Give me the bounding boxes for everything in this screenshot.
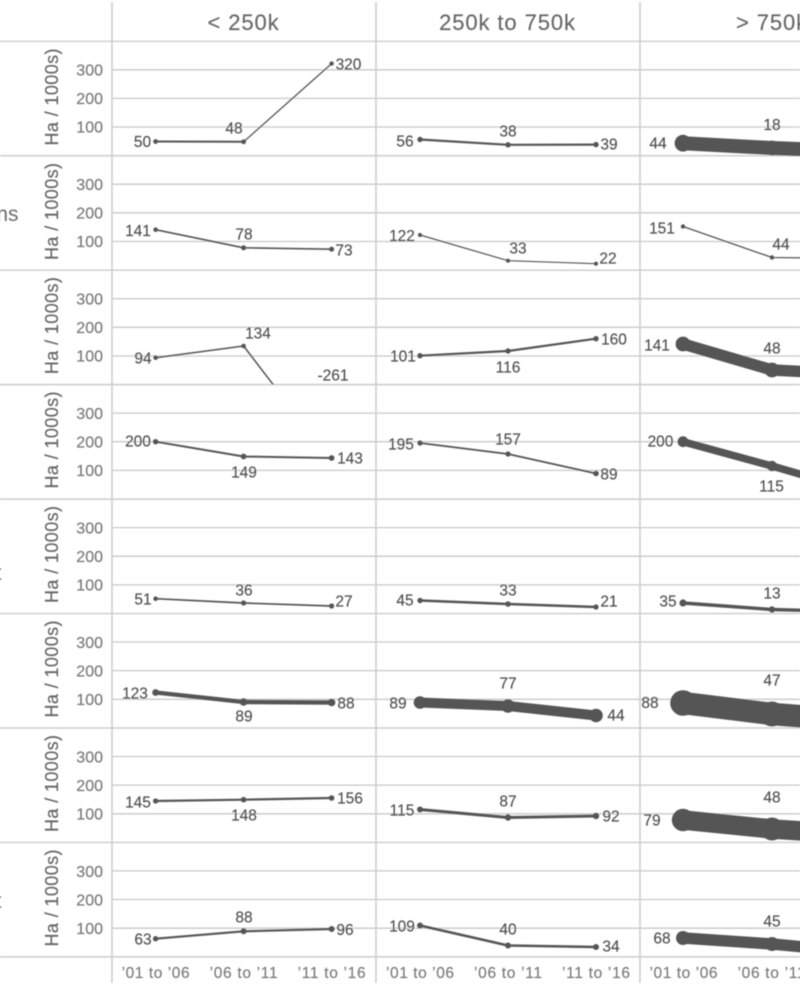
y axis: row 8: 100 — [76, 921, 103, 938]
line panel: row 1, 250k to 750k — [396, 124, 618, 154]
y axis: row 4: Ha / 1000s) — [42, 392, 62, 488]
y axis: row 2: 300 — [76, 177, 103, 194]
line panel: row 4, 250k to 750k: 157 — [495, 432, 521, 448]
line panel: row 1, 250k to 750k: 38 — [499, 124, 517, 140]
column heading: 250k to 750k: 250k to 750k — [439, 10, 576, 35]
line panel: row 4, 250k to 750k — [388, 432, 618, 484]
line panel: row 3, 250k to 750k — [390, 332, 627, 376]
line panel: row 8, 250k to 750k: 34 — [602, 938, 620, 956]
line panel: row 8, over 750k: 45 — [763, 914, 781, 930]
line panel: row 8, over 750k — [653, 914, 800, 951]
y axis: row 1: 200 — [76, 91, 103, 108]
line panel: row 6, over 750k: 88 — [641, 695, 659, 712]
y axis: row 6: 200 — [76, 664, 103, 681]
line panel: row 3, 250k to 750k: 160 — [601, 332, 627, 348]
y axis: row 1: 300 — [76, 63, 103, 80]
line panel: row 5, over 750k — [659, 586, 800, 613]
line panel: row 2, 250k to 750k: 122 — [389, 228, 415, 245]
y axis: row 6: Ha / 1000s) — [42, 620, 62, 718]
line panel: row 3, over 750k — [644, 337, 800, 377]
line panel: row 6, under 250k — [122, 686, 355, 726]
y axis: row 5: 100 — [76, 578, 103, 595]
line panel: row 2, under 250k: 141 — [125, 223, 151, 240]
x axis labels: over 750k: ’01 to ’06 — [650, 965, 718, 982]
y axis: row 3: Ha / 1000s) — [42, 277, 62, 374]
line panel: row 5, 250k to 750k: 33 — [499, 582, 517, 600]
line panel: row 1, over 750k — [649, 117, 800, 155]
y axis: row 6: 100 — [76, 692, 103, 709]
line panel: row 8, under 250k: 96 — [336, 922, 354, 939]
line panel: row 8, under 250k: 63 — [134, 932, 152, 948]
y axis: row 6: 300 — [76, 635, 103, 652]
line panel: row 7, 250k to 750k: 87 — [499, 794, 517, 810]
line panel: row 7, under 250k: 148 — [231, 808, 257, 824]
y axis: row 4: 200 — [76, 435, 103, 452]
line panel: row 1, 250k to 750k: 56 — [396, 134, 414, 150]
x axis labels: under 250k — [122, 965, 366, 982]
y axis: row 5 — [42, 506, 103, 603]
line panel: row 4, under 250k: 200 — [125, 434, 151, 450]
y axis: row 1: 100 — [76, 120, 103, 137]
line panel: row 5, over 750k: 13 — [763, 586, 781, 602]
line panel: row 6, over 750k: 47 — [763, 672, 781, 690]
x axis labels: 250k to 750k — [386, 965, 630, 982]
line panel: row 8, under 250k: 88 — [235, 910, 253, 926]
y axis: row 5: Ha / 1000s) — [42, 506, 62, 603]
y axis: row 7 — [42, 735, 103, 832]
y axis: row 4 — [42, 392, 103, 488]
column heading: under 250k: < 250k — [207, 10, 280, 35]
line panel: row 5, under 250k: 27 — [335, 594, 353, 610]
line panel: row 3, under 250k (third point clipped off scale) — [134, 326, 348, 385]
y axis: row 7: 200 — [76, 778, 103, 795]
line panel: row 3, under 250k (third point clipped off scale): 94 — [134, 350, 152, 368]
y axis: row 2 — [42, 163, 103, 260]
line panel: row 1, 250k to 750k: 39 — [600, 136, 618, 154]
y axis: row 8: 300 — [76, 864, 103, 881]
line panel: row 8, 250k to 750k: 40 — [499, 922, 517, 938]
line panel: row 4, under 250k: 149 — [231, 464, 257, 482]
y axis: row 3: 300 — [76, 292, 103, 309]
line panel: row 5, over 750k: 35 — [659, 594, 677, 610]
line panel: row 7, under 250k — [125, 790, 363, 824]
line panel: row 8, 250k to 750k: 109 — [389, 918, 415, 936]
line panel: row 3, over 750k: 48 — [763, 340, 781, 358]
line panel: row 3, 250k to 750k: 101 — [390, 348, 416, 366]
line panel: row 1, over 750k: 44 — [649, 136, 667, 152]
line panel: row 2, under 250k: 78 — [235, 226, 253, 244]
line panel: row 6, 250k to 750k: 77 — [499, 676, 517, 692]
line panel: row 1, under 250k — [134, 56, 362, 151]
x axis labels: under 250k: ’01 to ’06 — [122, 965, 190, 982]
y axis: row 5: 200 — [76, 549, 103, 566]
cropped row label fragments — [0, 203, 18, 913]
x axis labels: 250k to 750k: ’01 to ’06 — [386, 965, 454, 982]
y axis: row 5: 300 — [76, 521, 103, 538]
line panel: row 4, over 750k: 200 — [648, 434, 674, 450]
x axis labels: 250k to 750k: ’11 to ’16 — [562, 965, 630, 982]
line panel: row 2, under 250k — [125, 223, 353, 260]
line panel: row 8, 250k to 750k — [389, 918, 620, 956]
line panel: row 7, under 250k: 156 — [337, 790, 363, 808]
y axis: row 7: Ha / 1000s) — [42, 735, 62, 832]
y axis: row 4: 100 — [76, 463, 103, 480]
y axis: row 2: 100 — [76, 234, 103, 251]
line panel: row 1, under 250k: 320 — [336, 56, 362, 74]
y axis: row 7: 100 — [76, 807, 103, 824]
line panel: row 5, under 250k: 36 — [235, 582, 253, 600]
line panel: row 4, under 250k: 143 — [337, 450, 363, 468]
y axis: row 8: 200 — [76, 893, 103, 910]
y axis: row 1: Ha / 1000s) — [42, 48, 62, 146]
y axis: row 6 — [42, 620, 103, 718]
line panel: row 2, over 750k: 151 — [649, 220, 675, 238]
y axis: row 3: 100 — [76, 349, 103, 366]
y axis: row 7: 300 — [76, 750, 103, 767]
line panel: row 1, under 250k: 48 — [225, 120, 243, 138]
y axis: row 8 — [42, 850, 103, 946]
line panel: row 4, 250k to 750k: 195 — [388, 436, 414, 454]
line panel: row 2, over 750k — [649, 220, 800, 260]
line panel: row 6, under 250k: 89 — [235, 708, 253, 726]
line panel: row 6, over 750k — [641, 672, 800, 726]
line panel: row 2, under 250k: 73 — [335, 242, 353, 260]
line panel: row 6, under 250k: 88 — [337, 696, 355, 712]
y axis: row 2: 200 — [76, 206, 103, 223]
line panel: row 5, 250k to 750k — [396, 582, 618, 610]
line panel: row 5, under 250k — [134, 582, 353, 610]
y axis: row 3: 200 — [76, 320, 103, 337]
y axis: row 4: 300 — [76, 406, 103, 423]
line panel: row 5, 250k to 750k: 21 — [600, 594, 618, 610]
line panel: row 7, over 750k: 48 — [763, 790, 781, 806]
y axis: row 3 — [42, 277, 103, 374]
line panel: row 6, 250k to 750k — [389, 676, 625, 724]
line panel: row 7, over 750k: 79 — [643, 812, 661, 830]
line panel: row 2, over 750k: 44 — [772, 236, 790, 254]
line panel: row 2, 250k to 750k: 33 — [509, 240, 527, 258]
line panel: row 1, over 750k: 18 — [763, 117, 781, 134]
line panel: row 4, over 750k: 115 — [759, 478, 784, 496]
y axis: row 1 — [42, 48, 103, 146]
line panel: row 3, over 750k: 141 — [644, 338, 670, 354]
x axis labels: 250k to 750k: ’06 to ’11 — [474, 965, 542, 982]
line panel: row 6, 250k to 750k: 89 — [389, 696, 407, 712]
line panel: row 3, 250k to 750k: 116 — [496, 360, 520, 376]
x axis labels: over 750k — [650, 965, 800, 982]
line panel: row 2, 250k to 750k: 22 — [599, 250, 617, 268]
line panel: row 3, under 250k (third point clipped off scale): -261 — [317, 368, 349, 384]
line panel: row 7, 250k to 750k: 115 — [390, 802, 414, 820]
line panel: row 4, 250k to 750k: 89 — [600, 466, 618, 484]
line panel: row 8, under 250k — [134, 910, 354, 948]
line panel: row 4, over 750k — [648, 434, 800, 496]
line panel: row 7, 250k to 750k: 92 — [602, 808, 620, 826]
line panel: row 7, 250k to 750k — [390, 794, 620, 826]
line panel: row 5, 250k to 750k: 45 — [396, 592, 414, 610]
line panel: row 3, under 250k (third point clipped off scale): 134 — [245, 326, 271, 342]
line panel: row 6, 250k to 750k: 44 — [607, 708, 625, 724]
line panel: row 7, over 750k — [643, 790, 800, 840]
y axis: row 8: Ha / 1000s) — [42, 850, 62, 946]
line panel: row 6, under 250k: 123 — [122, 686, 148, 702]
y axis: row 2: Ha / 1000s) — [42, 163, 62, 260]
line panel: row 8, over 750k: 68 — [653, 930, 671, 948]
x axis labels: under 250k: ’11 to ’16 — [298, 965, 366, 982]
line panel: row 7, under 250k: 145 — [125, 794, 151, 812]
line panel: row 2, 250k to 750k — [389, 228, 617, 268]
line panel: row 1, under 250k: 50 — [134, 134, 151, 151]
line panel: row 5, under 250k: 51 — [134, 592, 152, 608]
line panel: row 4, under 250k — [125, 434, 363, 482]
x axis labels: under 250k: ’06 to ’11 — [210, 965, 278, 982]
